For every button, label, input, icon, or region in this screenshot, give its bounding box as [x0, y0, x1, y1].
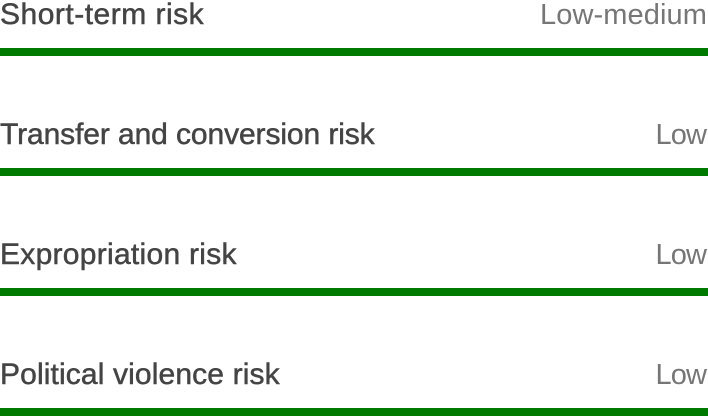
green rating bar [0, 168, 708, 176]
green rating bar [0, 48, 708, 56]
risk row: short-term risk [0, 0, 708, 56]
rating: Low [656, 239, 706, 271]
rating: Low [656, 359, 706, 391]
risk row: expropriation risk [0, 238, 708, 296]
rating: Low [656, 119, 706, 151]
green rating bar [0, 408, 708, 416]
label: Political violence risk [0, 358, 280, 391]
label: Transfer and conversion risk [0, 118, 375, 151]
green rating bar [0, 288, 708, 296]
risk row: transfer and conversion risk [0, 118, 708, 176]
label: Expropriation risk [0, 238, 237, 271]
risk row: political violence risk [0, 358, 708, 416]
